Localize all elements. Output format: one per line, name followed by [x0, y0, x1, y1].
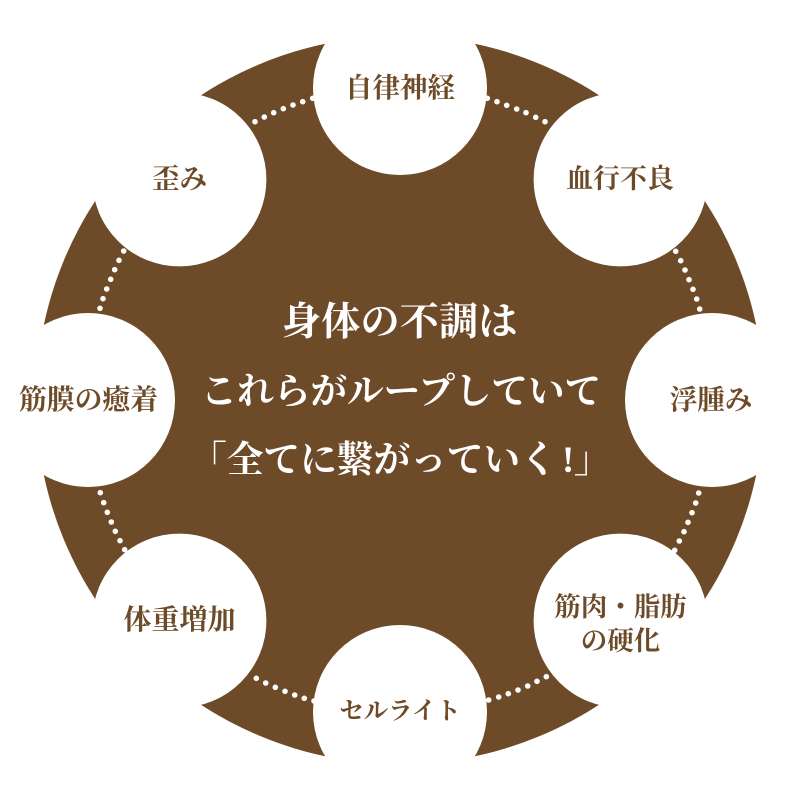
label: poor circulation: 血行不良	[566, 164, 674, 194]
label: autonomic nerves: 自律神経	[345, 72, 455, 103]
central message: 」	[574, 439, 611, 480]
label: cellulite: セルライト	[339, 698, 461, 725]
central message: 身体の不調は	[282, 300, 518, 344]
central message	[190, 300, 611, 480]
label: swelling: 浮腫み	[670, 384, 752, 415]
label: fascia adhesion: 筋膜の癒着	[19, 385, 158, 416]
central message: これらがループしていて	[201, 370, 601, 412]
central message: 「全てに繋がっていく	[190, 439, 557, 480]
label: weight gain: 体重増加	[123, 604, 236, 636]
dotted connectors between circles	[97, 96, 702, 704]
central message: !	[562, 439, 574, 480]
label: muscle and fat hardening	[554, 592, 687, 656]
label: muscle and fat hardening: の硬化	[581, 626, 660, 656]
label: muscle and fat hardening: 筋肉・脂肪	[554, 592, 687, 622]
label: distortion: 歪み	[152, 163, 207, 194]
